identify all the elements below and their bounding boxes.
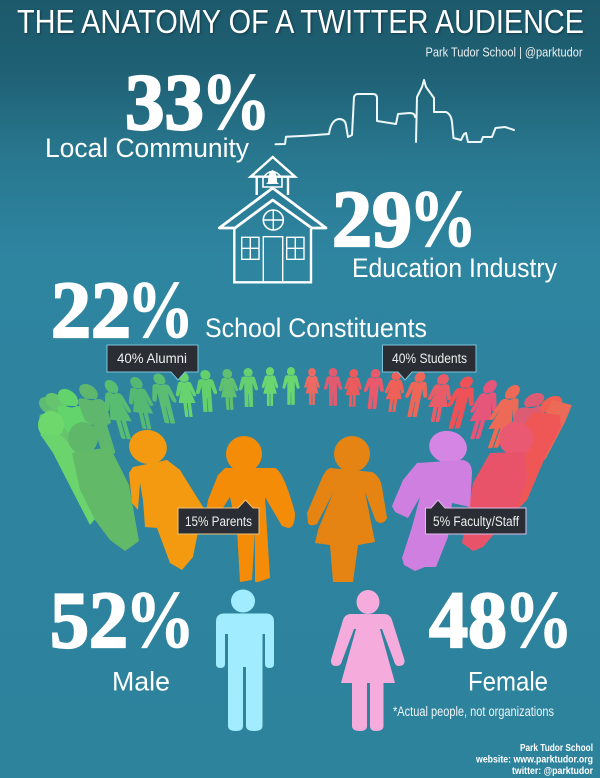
stat: 22%	[51, 264, 194, 355]
label: male: Male	[112, 666, 170, 696]
stat: 48%: 48	[429, 577, 507, 665]
callout: 15% parents	[178, 500, 259, 534]
chart: orange parents crowd	[125, 426, 387, 582]
stat: 29%: %	[409, 173, 477, 264]
stat: 52%: 52	[50, 577, 128, 665]
stat: 33%: %	[201, 56, 271, 147]
chart: purple faculty figure	[392, 427, 472, 571]
stat: 52%	[50, 574, 195, 665]
icon: male figure	[216, 590, 274, 731]
label: local community: Local Community	[45, 133, 249, 163]
icon: female figure	[331, 590, 405, 731]
stat: 29%: 29	[332, 176, 412, 264]
callout: 40% students	[382, 345, 476, 380]
callout: 40% students: 40% Students	[392, 351, 467, 366]
stat: 29%	[332, 173, 477, 264]
icon: schoolhouse	[219, 157, 326, 282]
callout: 5% faculty/staff	[426, 500, 526, 534]
stat: 33%	[125, 56, 271, 147]
footer credits	[475, 743, 593, 777]
footnote: *Actual people, not organizations	[393, 704, 554, 719]
callout: 5% faculty/staff: 5% Faculty/Staff	[433, 514, 519, 529]
label: school constituents: School Constituents	[205, 313, 427, 343]
stat: 22%: %	[127, 264, 194, 355]
callout: 15% parents: 15% Parents	[185, 514, 252, 529]
stat: 22%: 22	[51, 267, 131, 355]
callout: 40% alumni	[107, 345, 198, 380]
label: education industry: Education Industry	[352, 253, 557, 283]
chart: green alumni crowd	[30, 367, 300, 551]
callout: 40% alumni: 40% Alumni	[117, 351, 187, 366]
stat: 48%	[429, 574, 573, 665]
label: female: Female	[468, 666, 548, 696]
stat: 52%: %	[125, 574, 195, 665]
stat: 33%: 33	[125, 59, 204, 147]
stat: 48%: %	[504, 574, 573, 665]
chart: red students crowd	[304, 368, 572, 551]
icon: city skyline	[276, 80, 514, 144]
